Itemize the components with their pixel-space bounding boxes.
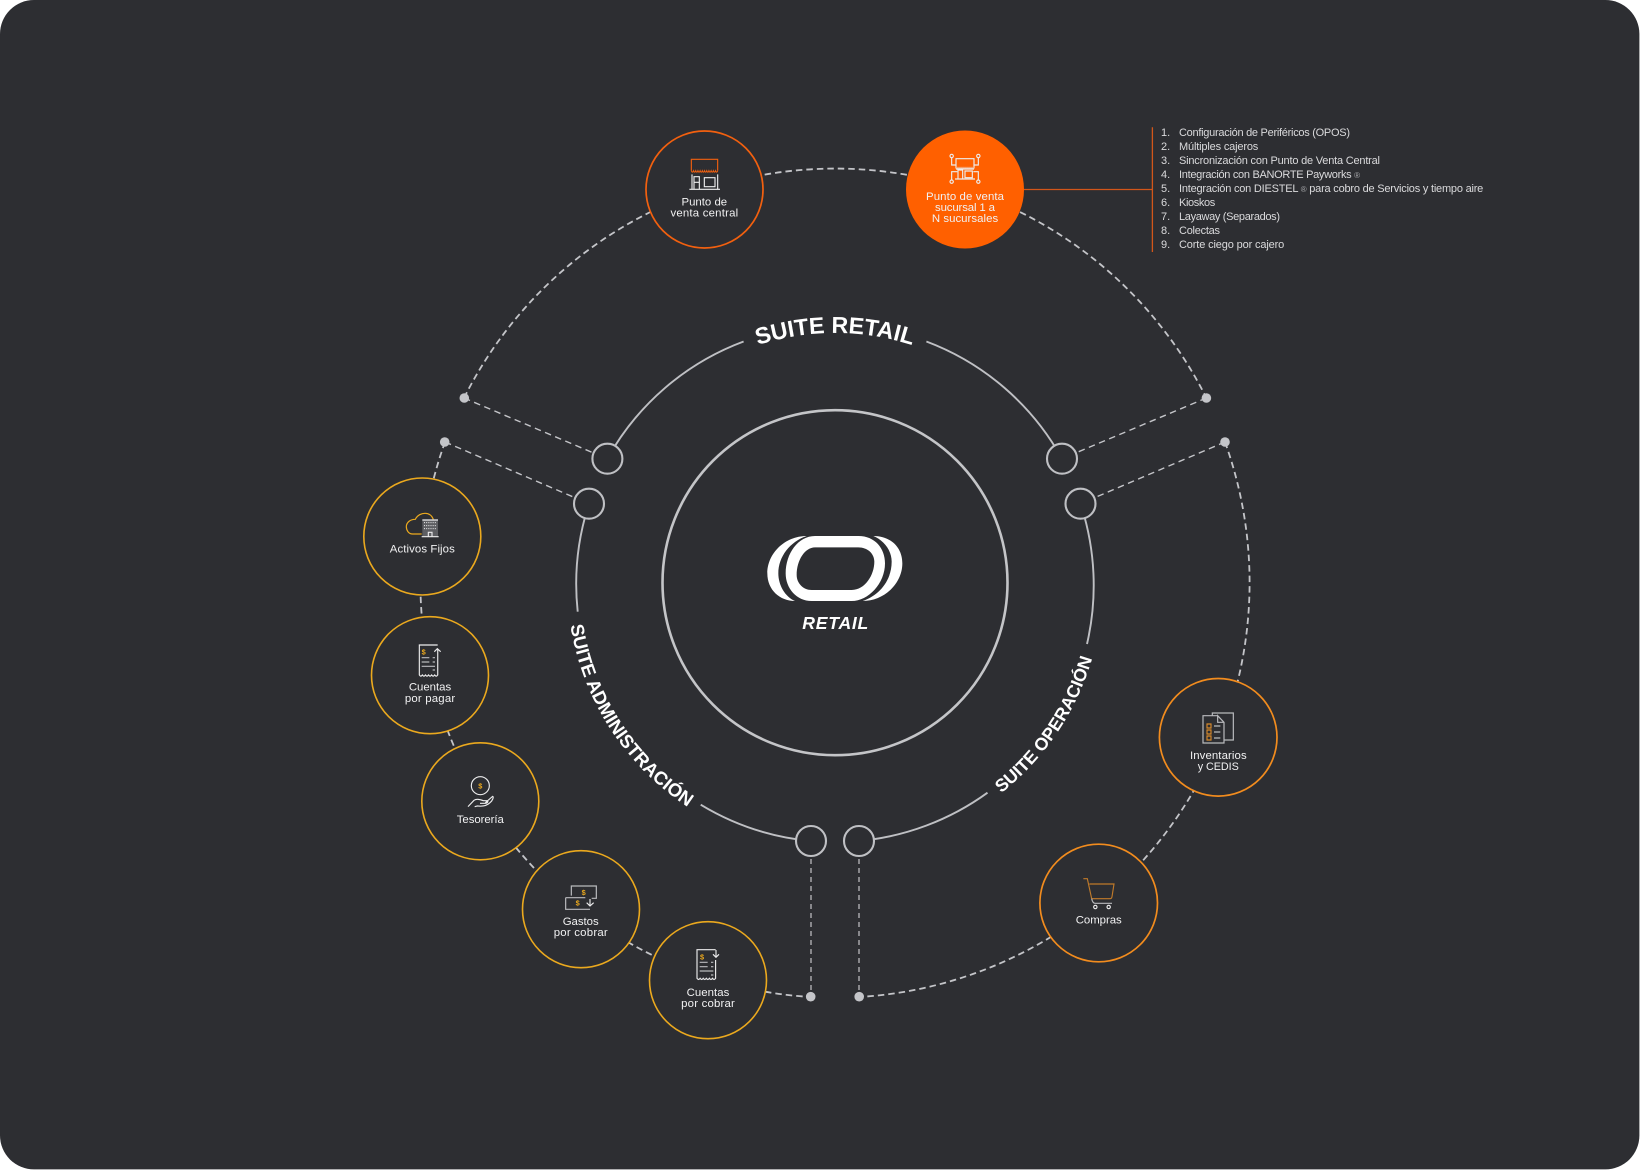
feature list: Sincronización con Punto de Venta Central <box>1179 155 1380 167</box>
feature list: 2. <box>1161 141 1170 153</box>
icon: receipt up: $ <box>422 647 426 656</box>
node: cuentas por pagar <box>372 617 488 734</box>
node: punto de venta sucursal: N sucursales <box>932 213 998 225</box>
icon: coin in hand: $ <box>478 782 482 791</box>
logo: retail <box>767 536 902 633</box>
icon: cloud building <box>406 513 439 537</box>
node: punto de venta central: venta central <box>670 208 738 220</box>
node: punto de venta sucursal <box>906 130 1024 248</box>
icon: bills <box>566 886 596 909</box>
ring label: Suite Operacion: SUITE OPERACIÓN <box>996 656 1092 792</box>
node: tesoreria <box>422 743 539 860</box>
middle ring arcs <box>576 342 1094 841</box>
ring label: Suite Administracion: SUITE ADMINISTRACIÓN <box>571 624 694 806</box>
icon: documents checklist <box>1203 713 1233 743</box>
feature list: Colectas <box>1179 225 1220 237</box>
icon: bills: $ <box>576 899 580 908</box>
node: gastos por cobrar: por cobrar <box>554 927 608 939</box>
node: cuentas por cobrar: Cuentas <box>687 987 730 999</box>
feature list: Layaway (Separados) <box>1179 211 1280 223</box>
node: inventarios y cedis <box>1159 678 1277 796</box>
callout connector <box>1024 127 1152 252</box>
feature list: Corte ciego por cajero <box>1179 239 1284 251</box>
junction circles on ring <box>574 444 1096 856</box>
node: gastos por cobrar: Gastos <box>563 916 599 928</box>
feature list: 3. <box>1161 155 1170 167</box>
feature list: Kioskos <box>1179 197 1216 209</box>
node: activos fijos: Activos Fijos <box>390 543 455 555</box>
node: cuentas por cobrar <box>650 922 766 1039</box>
node: inventarios y cedis: Inventarios <box>1190 750 1247 762</box>
feature list: Configuración de Periféricos (OPOS) <box>1179 127 1350 139</box>
feature list: 9. <box>1161 239 1170 251</box>
feature list: 4. <box>1161 169 1170 181</box>
node: punto de venta central: Punto de <box>681 197 727 209</box>
node: cuentas por cobrar: por cobrar <box>681 998 735 1010</box>
feature list: 5. <box>1161 183 1170 195</box>
icon: connected store <box>950 154 980 183</box>
central ring <box>662 410 1008 755</box>
feature list: Múltiples cajeros <box>1179 141 1259 153</box>
feature list: Integración con DIESTEL ® para cobro de Servicios y tiempo aire <box>1179 183 1483 195</box>
logo: retail: RETAIL <box>802 613 868 633</box>
node: punto de venta sucursal: sucursal 1 a <box>935 202 996 214</box>
icon: shopping cart <box>1083 879 1114 909</box>
feature list: 1. <box>1161 127 1170 139</box>
feature list: 8. <box>1161 225 1170 237</box>
dashed outer arcs and connectors <box>420 169 1250 997</box>
icon: receipt down: $ <box>700 952 704 961</box>
end dots <box>440 393 1230 1002</box>
node: cuentas por pagar: Cuentas <box>409 682 451 694</box>
ring label: Suite Retail: SUITE RETAIL <box>756 317 912 345</box>
node: inventarios y cedis: y CEDIS <box>1198 761 1239 773</box>
feature list: Integración con BANORTE Payworks ® <box>1179 169 1360 181</box>
feature list: 6. <box>1161 197 1170 209</box>
node: tesoreria: Tesorería <box>457 814 504 826</box>
node: punto de venta sucursal: Punto de venta <box>926 191 1005 203</box>
node: activos fijos <box>364 478 481 595</box>
icon: store <box>689 159 720 189</box>
node: gastos por cobrar <box>522 851 640 968</box>
node: compras: Compras <box>1076 915 1122 927</box>
feature list: 7. <box>1161 211 1170 223</box>
node: cuentas por pagar: por pagar <box>405 693 455 705</box>
node: compras <box>1040 844 1157 962</box>
feature list <box>1161 127 1483 251</box>
node: punto de venta central <box>646 131 763 248</box>
icon: bills: $ <box>582 888 586 897</box>
